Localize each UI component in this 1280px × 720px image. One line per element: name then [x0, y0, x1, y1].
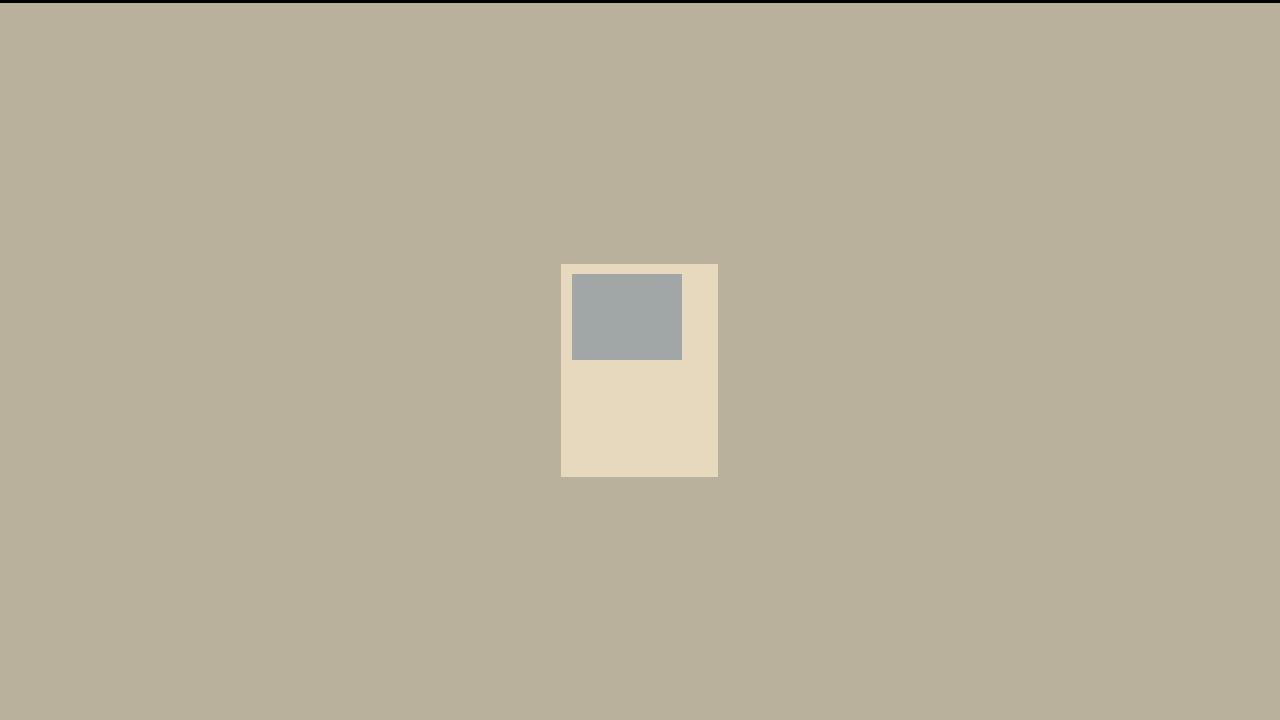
top black bar	[0, 0, 1280, 3]
panel: card	[561, 264, 718, 477]
image placeholder	[572, 274, 682, 360]
